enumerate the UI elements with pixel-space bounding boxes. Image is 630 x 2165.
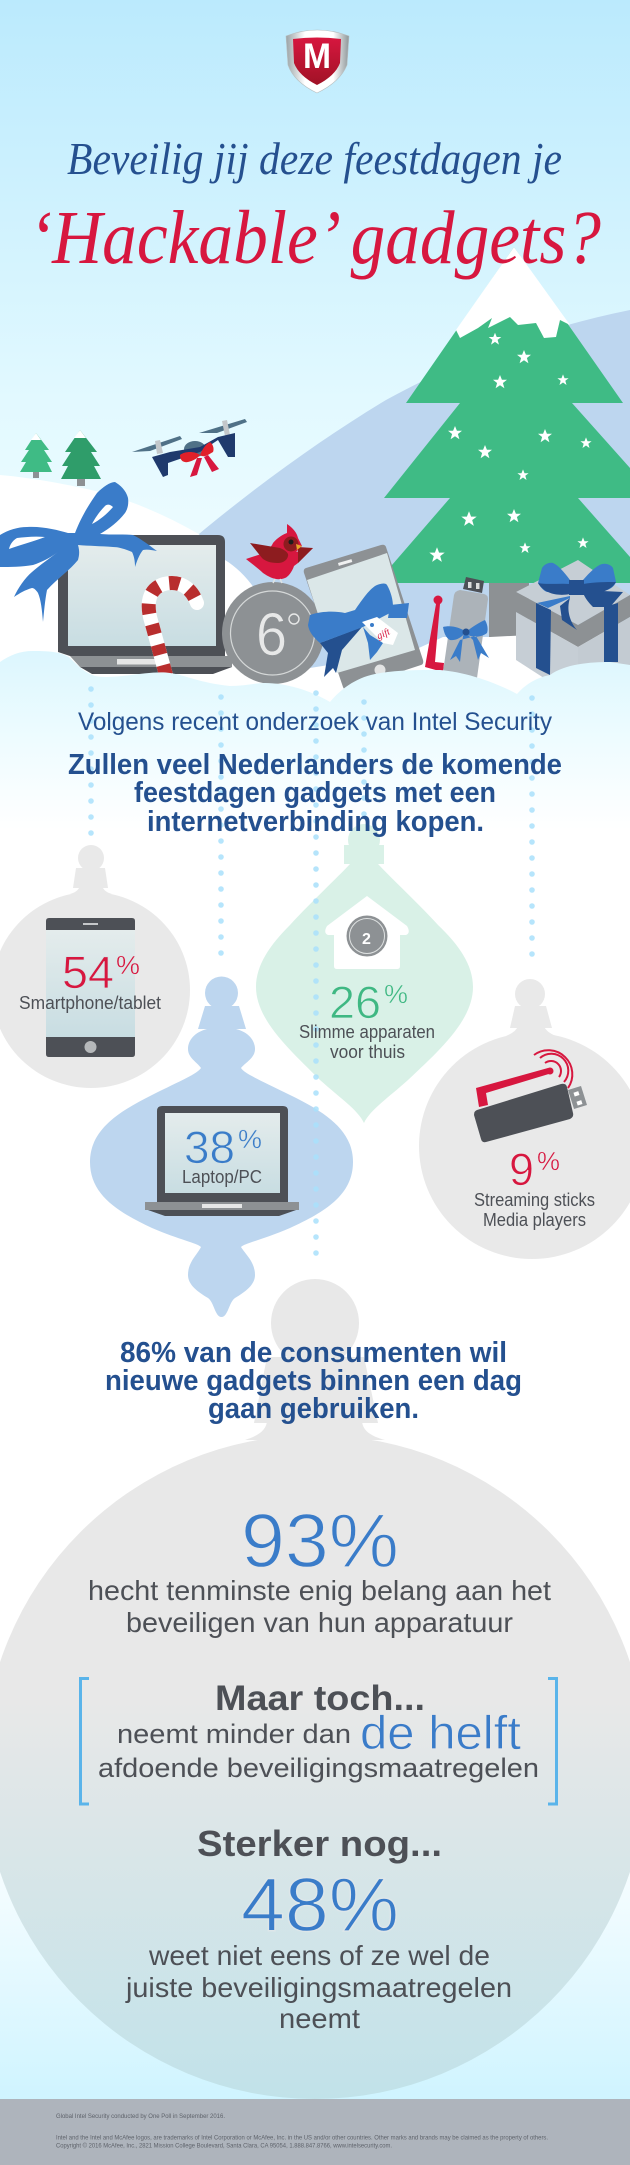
heading: 86 percent: nieuwe gadgets binnen een dag [105,1365,522,1397]
intro text: Volgens recent onderzoek van Intel Security [78,708,552,736]
drone with bow [132,419,247,477]
heading: gadgets: internetverbinding kopen. [147,806,484,838]
stat: 93 percent: beveiligen van hun apparatuur [126,1607,513,1638]
stat: 48 percent: 48% [241,1863,399,1948]
cardinal bird [246,524,313,583]
blue hill [180,310,630,720]
smart home stat [299,896,435,1062]
laptop icon [145,1106,299,1216]
ornament: smartphone and tablet cap and body [0,845,190,1088]
dotted hanging lines [91,689,532,1268]
logo shield [286,30,349,93]
callout: maar toch [98,1679,539,1783]
smartphone stat: Smartphone/tablet [19,992,161,1013]
laptop stat: Laptop/PC [182,1166,262,1187]
small pine trees [20,430,101,486]
ornament: streaming stick body [419,979,630,1259]
snow hill left and snowy ground [0,475,630,730]
laptop stat: % [238,1124,262,1154]
callout: maar toch: afdoende beveiligingsmaatregelen [98,1753,539,1783]
gift box [516,560,630,700]
heading: 86 percent: 86% van de consumenten wil [120,1337,507,1369]
streaming stat: 9 [509,1144,534,1195]
laptop stat [145,1106,299,1216]
smartphone stat: % [116,950,140,980]
footer: Copyright © 2016 McAfee, Inc., 2821 Mission College Boulevard, Santa Clara, CA 95054, 1.888.847.8766, www.intelsecurity.com. [56,2142,392,2150]
heading: gadgets [68,749,562,838]
ornament: smart home body [256,824,473,1123]
streaming stat [474,1050,595,1230]
house icon: 2 [362,931,371,948]
streaming stat: % [537,1146,560,1176]
streaming stat: Streaming sticks [474,1189,595,1210]
stat: 48 percent [125,1823,512,2034]
heading: gadgets: feestdagen gadgets met een [134,777,496,809]
gift tag [362,617,398,645]
smartphone stat: 54 [62,947,114,998]
footer: Global Intel Security conducted by One Poll in September 2016. [56,2113,225,2120]
footer: Intel and the Intel and McAfee logos, are trademarks of Intel Corporation or McAfee, Inc. in the US and/or other countries. Other marks and brands may be claimed as the property of others. [56,2134,548,2142]
blue brackets [80,1678,556,1804]
usb stick with bow [443,577,489,678]
smart home stat: voor thuis [330,1041,405,1062]
big ornament [0,1279,630,2099]
thermostat: 6 [256,601,287,668]
smart home stat: Slimme apparaten [299,1021,435,1042]
smart home stat: % [384,979,408,1009]
callout: maar toch: neemt minder dan [117,1719,351,1749]
laptop stat: 38 [184,1122,235,1173]
logo shield: M [303,37,331,76]
smart home stat: 26 [329,977,381,1028]
heading: 86 percent [105,1337,522,1425]
house icon [325,896,409,969]
streaming stick icon [474,1050,587,1142]
callout: maar toch: Maar toch... [215,1679,425,1718]
laptop blue bow [0,482,157,622]
footer [0,2099,630,2165]
phone icon [46,918,135,1057]
stat: 48 percent: weet niet eens of ze wel de [148,1940,490,1971]
stat: 93 percent: 93% [241,1499,399,1584]
router antenna [425,596,444,672]
snow drifts [0,651,630,840]
heading: 86 percent: gaan gebruiken. [208,1393,419,1425]
callout: maar toch: de helft [360,1706,521,1759]
candy cane [149,583,197,675]
heading: gadgets: Zullen veel Nederlanders de komende [68,749,562,781]
stat: 93 percent [88,1499,551,1638]
gift tag: gift [375,626,392,642]
christmas tree [384,247,630,637]
streaming stat: Media players [483,1209,586,1230]
ornament: laptop body [90,976,353,1317]
stat: 93 percent: hecht tenminste enig belang aan het [88,1575,551,1606]
stat: 48 percent: juiste beveiligingsmaatregelen [125,1972,512,2003]
stat: 48 percent: neemt [279,2003,360,2034]
stat: 48 percent: Sterker nog... [197,1823,442,1864]
title [29,134,601,280]
title: Beveilig jij deze feestdagen je [67,134,562,184]
tablet with bow [304,545,423,689]
laptop illustration [58,535,232,674]
smartphone stat [19,918,161,1057]
thermostat [222,582,324,684]
